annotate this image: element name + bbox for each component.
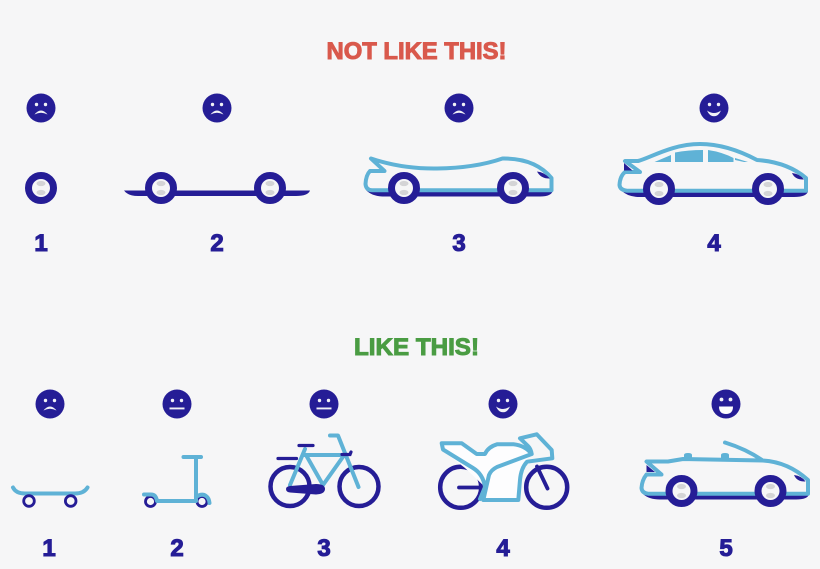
icon: skateboard bbox=[13, 488, 88, 506]
number 5: 5 bbox=[719, 535, 733, 562]
icon: happy open-mouth face bbox=[712, 390, 740, 418]
item 2: scooter bbox=[144, 390, 210, 562]
icon: complete car bbox=[620, 144, 808, 202]
item 5: convertible bbox=[642, 390, 809, 562]
item 1: skateboard bbox=[13, 390, 88, 562]
item 4: full car bbox=[620, 94, 808, 257]
number 2: 2 bbox=[210, 230, 224, 257]
icon: chassis with two wheels bbox=[124, 176, 310, 200]
icon: sad face bbox=[26, 94, 56, 122]
item 4: motorcycle bbox=[440, 390, 567, 562]
icon: wheel bbox=[28, 176, 54, 200]
icon: convertible car bbox=[642, 442, 809, 504]
icon: bicycle bbox=[270, 436, 378, 506]
icon: scooter bbox=[144, 457, 210, 506]
icon: motorcycle bbox=[440, 434, 567, 508]
heading: not like this: NOT LIKE THIS! bbox=[326, 38, 506, 65]
number 1: 1 bbox=[42, 535, 56, 562]
icon: neutral face bbox=[162, 390, 192, 418]
item 3: bicycle bbox=[270, 390, 378, 562]
item 3: car body without roof bbox=[366, 94, 553, 257]
number 4: 4 bbox=[496, 535, 510, 562]
number 3: 3 bbox=[452, 230, 466, 257]
icon: smiling face bbox=[700, 94, 728, 122]
icon: sad face bbox=[202, 94, 232, 122]
panel: like this row bbox=[13, 390, 809, 562]
icon: sad face bbox=[36, 390, 64, 418]
panel: not like this row bbox=[26, 94, 808, 257]
number 2: 2 bbox=[170, 535, 184, 562]
number 4: 4 bbox=[707, 230, 721, 257]
icon: smiling face bbox=[488, 390, 518, 418]
heading: like this: LIKE THIS! bbox=[354, 334, 479, 361]
number 1: 1 bbox=[34, 230, 48, 257]
number 3: 3 bbox=[317, 535, 331, 562]
icon: roofless car bbox=[366, 158, 553, 200]
icon: neutral face bbox=[310, 390, 338, 418]
icon: sad face bbox=[444, 94, 474, 122]
item 1: single wheel bbox=[26, 94, 56, 257]
item 2: wheels and chassis bbox=[124, 94, 310, 257]
